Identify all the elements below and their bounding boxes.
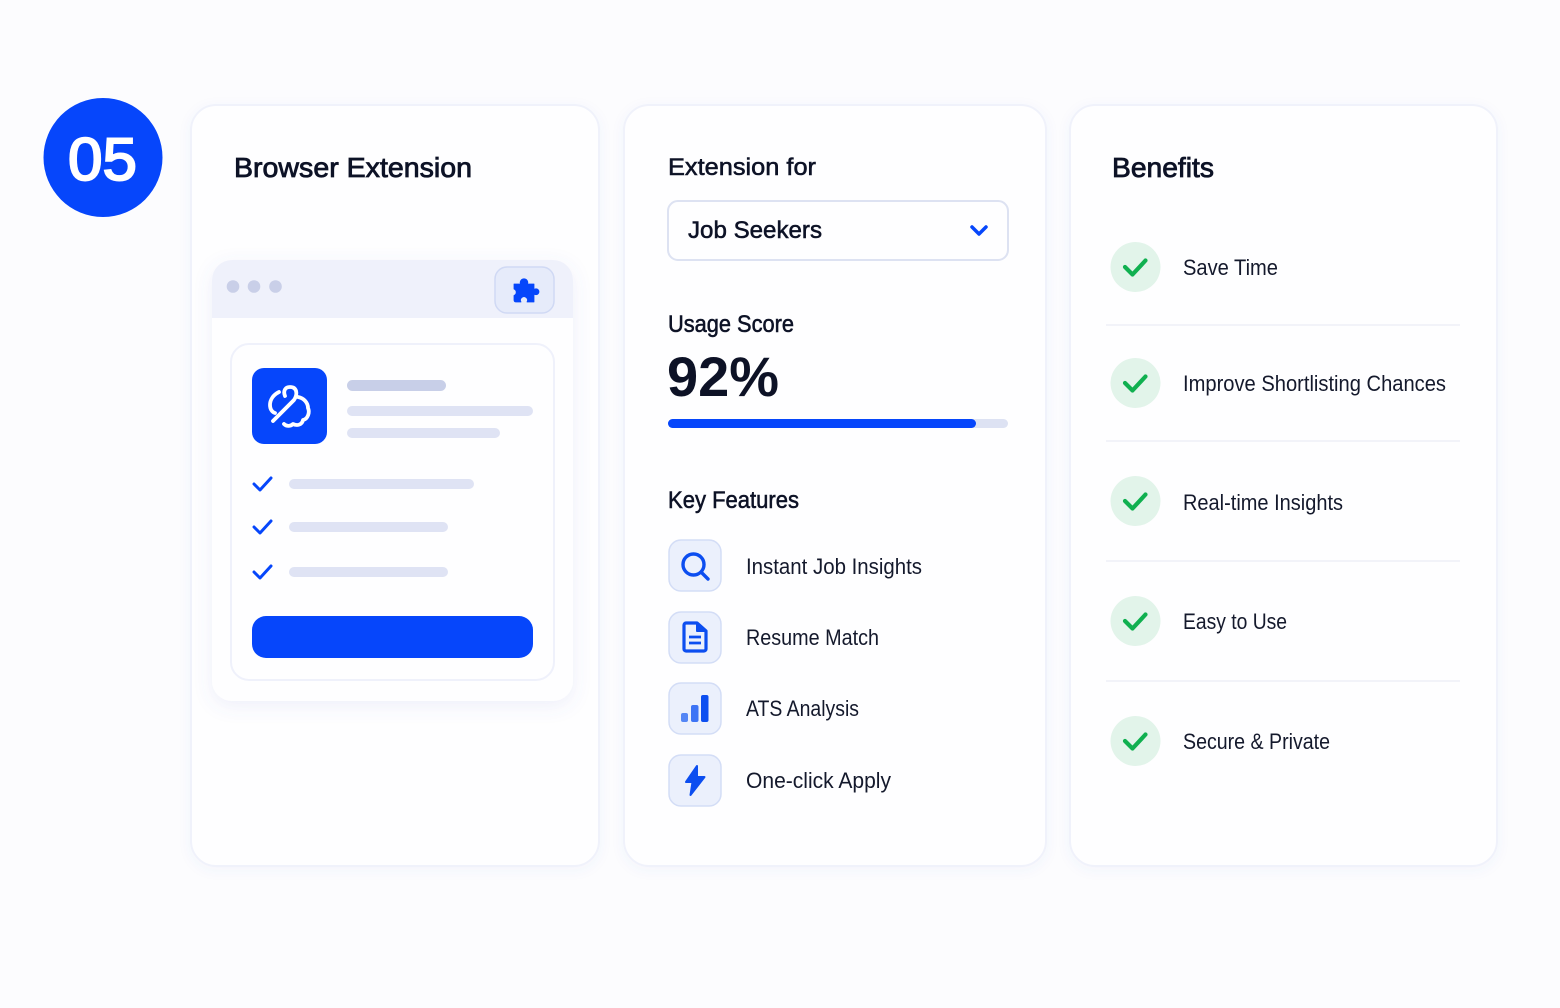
benefit: real-time insights: [1110, 476, 1343, 526]
feature: one-click apply: One-click Apply: [746, 768, 891, 793]
window dots: [227, 280, 282, 293]
dropdown: job seekers: Job Seekers: [688, 217, 822, 244]
panel: extension details: [624, 105, 1046, 866]
browser window illustration: [212, 260, 573, 701]
feature: ats analysis: ATS Analysis: [746, 696, 859, 721]
feature: instant job insights: [669, 540, 922, 591]
benefit: easy to use: [1110, 596, 1287, 646]
benefit: easy to use: Easy to Use: [1183, 609, 1287, 634]
step number badge: 05: [68, 126, 137, 193]
usage score label: Usage Score: [668, 311, 794, 338]
step number badge: [44, 98, 162, 217]
benefit: save time: Save Time: [1183, 255, 1278, 280]
browser title bar: [212, 260, 573, 318]
benefit: secure and private: Secure & Private: [1183, 729, 1330, 754]
benefit: secure and private: [1110, 716, 1330, 766]
heading: extension for: Extension for: [668, 154, 816, 181]
feature: ats analysis: [669, 683, 859, 734]
feature: instant job insights: Instant Job Insights: [746, 554, 922, 579]
heading: browser extension: Browser Extension: [234, 152, 472, 183]
usage score value: 92%: [667, 345, 779, 408]
heading: key features: Key Features: [668, 487, 799, 514]
extension popup card: [231, 344, 554, 680]
panel: benefits: [1070, 105, 1497, 866]
benefit: save time: [1110, 242, 1278, 292]
feature: resume match: [669, 612, 879, 663]
dropdown: job seekers: [668, 201, 1008, 260]
feature: resume match: Resume Match: [746, 625, 879, 650]
benefit: improve shortlisting chances: Improve Shortlisting Chances: [1183, 371, 1446, 396]
benefit: improve shortlisting chances: [1110, 358, 1446, 408]
benefit: real-time insights: Real-time Insights: [1183, 490, 1343, 515]
heading: benefits: Benefits: [1112, 152, 1214, 183]
usage progress bar: [668, 419, 1008, 428]
install button: [252, 616, 533, 658]
feature: one-click apply: [669, 755, 891, 806]
placeholder text lines: [347, 380, 533, 438]
icon: puzzle piece button: [495, 267, 554, 313]
checklist: [254, 478, 474, 578]
icon: app logo: [252, 368, 327, 444]
panel: browser extension: [191, 105, 599, 866]
